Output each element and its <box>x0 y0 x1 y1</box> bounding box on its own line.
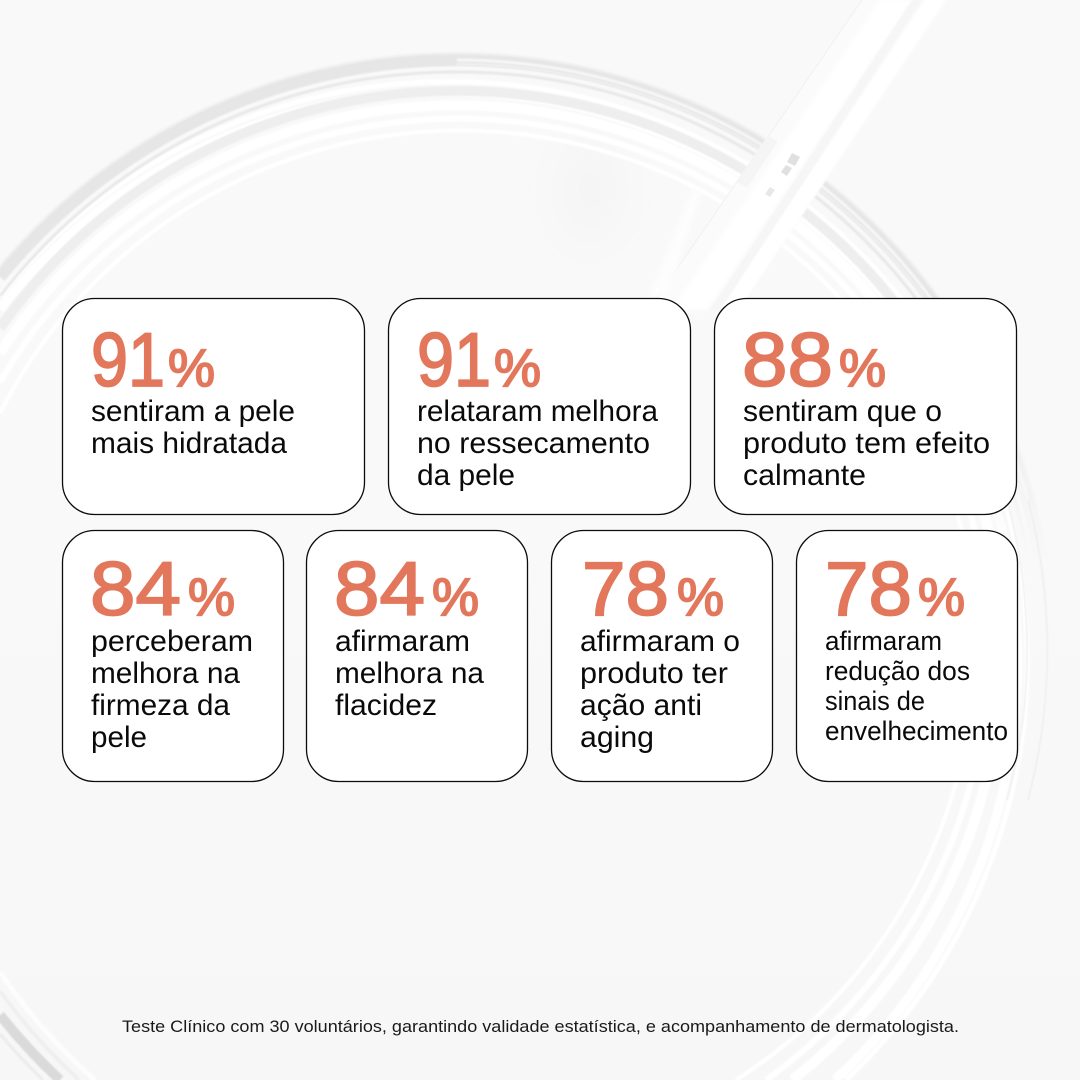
description: melhora na <box>91 657 240 690</box>
stat: 84%: % <box>188 568 235 627</box>
stat: 84%: 84 <box>334 547 425 632</box>
description: envelhecimento <box>825 716 1008 746</box>
description: sentiram a pele <box>91 395 295 428</box>
panel: 91% hidratada <box>62 298 364 514</box>
description: redução dos <box>825 656 970 686</box>
footnote: Teste Clínico com 30 voluntários, garantindo validade estatística, e acompanhamento de dermatologista. <box>122 1017 959 1036</box>
dish rim: fine lines on right side <box>1007 500 1047 800</box>
stat: 84%: 84 <box>90 547 181 632</box>
stat: 78% <box>582 547 724 632</box>
description: mais hidratada <box>91 427 287 460</box>
highlight stripes breaking up the band on the right <box>457 58 932 298</box>
description <box>743 395 990 492</box>
stat: 84%: % <box>432 568 479 627</box>
description <box>580 625 740 754</box>
description: melhora na <box>335 657 484 690</box>
description: produto ter <box>580 657 728 690</box>
description: relataram melhora <box>417 395 658 428</box>
description: ação anti <box>580 689 702 722</box>
stat: 91% <box>417 318 541 403</box>
description: afirmaram <box>335 625 470 658</box>
description: aging <box>580 721 654 754</box>
description <box>91 625 253 754</box>
description: calmante <box>743 459 866 492</box>
stat: 78%: 78 <box>582 547 669 632</box>
stat: 88% <box>742 318 886 403</box>
description: sinais de <box>825 686 925 716</box>
description: pele <box>91 721 147 754</box>
stat: 78%: % <box>677 568 724 627</box>
description: perceberam <box>91 625 253 658</box>
stat: 91%: % <box>494 339 541 398</box>
description: afirmaram o <box>580 625 740 658</box>
stat: 91%: 91 <box>91 318 165 403</box>
stat: 84% <box>90 547 235 632</box>
stat: 91% <box>91 318 215 403</box>
stat: 84% <box>334 547 479 632</box>
stat: 88%: % <box>839 339 886 398</box>
stat: 88%: 88 <box>742 318 833 403</box>
glass rod <box>650 0 948 310</box>
description: sentiram que o <box>743 395 942 428</box>
panel: 91% ressecamento <box>388 298 690 514</box>
stat: 91%: % <box>168 339 215 398</box>
stat: 78% <box>825 547 965 632</box>
panel: 84% firmeza <box>62 530 284 782</box>
description <box>417 395 658 492</box>
stat: 78%: 78 <box>825 547 912 632</box>
description <box>91 395 295 460</box>
description: firmeza da <box>91 689 230 722</box>
description: produto tem efeito <box>743 427 990 460</box>
panel: 78% anti aging <box>552 530 772 782</box>
panel: 88% calmante <box>714 298 1016 514</box>
description: no ressecamento <box>417 427 650 460</box>
description <box>825 626 1008 746</box>
dish rim: grey bands, upper arc <box>0 53 1022 466</box>
description <box>335 625 484 722</box>
description: afirmaram <box>825 626 942 656</box>
rod collar and refraction marks <box>737 136 778 188</box>
description: da pele <box>417 459 515 492</box>
stat: 91%: 91 <box>417 318 491 403</box>
dish rim: lower-left arcs <box>0 972 95 1080</box>
stat: 78%: % <box>918 568 965 627</box>
panel: 78% envelhecimento <box>796 530 1018 782</box>
panel: 84% flacidez <box>306 530 528 782</box>
description: flacidez <box>335 689 437 722</box>
